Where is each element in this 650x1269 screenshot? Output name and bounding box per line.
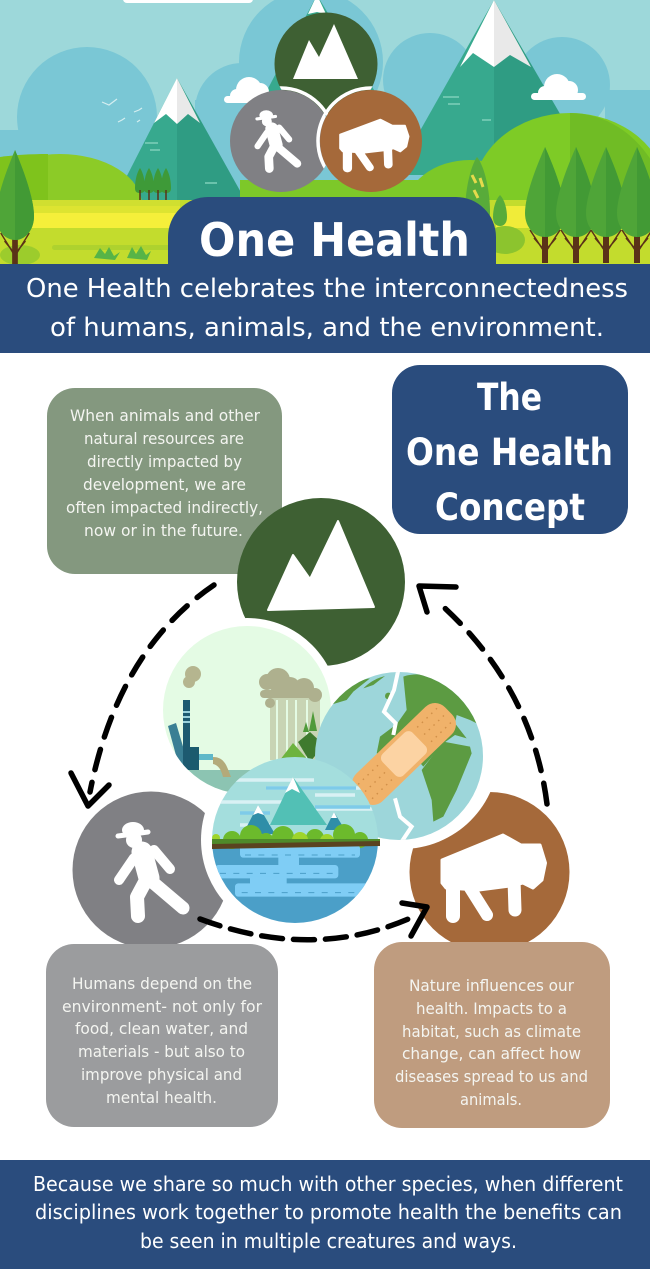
box text: now or in the future. xyxy=(84,521,243,540)
header illustration: mountain landscape xyxy=(0,0,650,277)
bushes xyxy=(465,157,525,254)
panel: concept heading xyxy=(392,365,628,534)
left mountain xyxy=(127,78,240,200)
box text: development, we are xyxy=(83,475,246,494)
closing text: be seen in multiple creatures and ways. xyxy=(140,1229,517,1253)
concept heading text: Concept xyxy=(435,486,585,529)
image: earth with bandage xyxy=(315,672,483,840)
panel: humans text box xyxy=(46,944,278,1127)
closing band xyxy=(0,1160,650,1269)
box text: animals. xyxy=(460,1090,522,1109)
box text: health. Impacts to a xyxy=(416,999,567,1018)
box text: materials - but also to xyxy=(78,1042,245,1061)
box text: When animals and other xyxy=(70,406,260,425)
right mountain xyxy=(409,0,560,175)
center mountain peak xyxy=(268,0,374,92)
box text: Humans depend on the xyxy=(72,974,252,993)
box text: environment- not only for xyxy=(62,997,262,1016)
concept heading text: One Health xyxy=(406,431,613,474)
background hills of sky xyxy=(0,0,650,190)
box text: change, can affect how xyxy=(402,1044,581,1063)
intro text: of humans, animals, and the environment. xyxy=(50,313,604,343)
icon: environment circle xyxy=(237,498,405,666)
bandage xyxy=(346,697,462,811)
ground strip xyxy=(212,839,380,846)
small trees xyxy=(135,168,171,200)
left hill xyxy=(0,154,142,200)
box text: Nature influences our xyxy=(409,976,574,995)
arrow: environment to humans xyxy=(71,585,214,806)
image: landscape with water xyxy=(212,757,380,923)
logo: person circle xyxy=(228,88,334,194)
closing text: Because we share so much with other species, when different xyxy=(33,1172,623,1196)
box text: often impacted indirectly, xyxy=(66,498,263,517)
arrow: animals to environment xyxy=(419,586,547,804)
icon: human circle xyxy=(72,792,230,948)
arrow: humans to animals xyxy=(200,903,427,940)
logo: bison circle xyxy=(318,88,424,194)
left tree xyxy=(0,150,34,266)
clouds xyxy=(224,74,586,103)
intro band xyxy=(0,264,650,353)
box text: food, clean water, and xyxy=(75,1019,248,1038)
box text: improve physical and xyxy=(81,1065,242,1084)
box text: directly impacted by xyxy=(87,452,242,471)
white halos behind center images xyxy=(155,618,499,934)
box text: diseases spread to us and xyxy=(395,1067,588,1086)
panel: animals and natural resources text box xyxy=(47,388,282,574)
logo: mountain circle xyxy=(274,12,378,116)
right hills xyxy=(240,113,650,200)
grass tufts xyxy=(94,246,151,260)
yellow field xyxy=(0,200,650,266)
panel: nature text box xyxy=(374,942,610,1128)
title: One Health xyxy=(199,213,470,267)
closing text: disciplines work together to promote health the benefits can xyxy=(35,1200,622,1224)
concept heading text: The xyxy=(477,376,542,419)
box text: mental health. xyxy=(106,1088,217,1107)
box text: habitat, such as climate xyxy=(402,1022,581,1041)
intro text: One Health celebrates the interconnectedness xyxy=(26,274,628,304)
birds xyxy=(102,99,142,122)
right trees xyxy=(525,147,650,263)
title tab xyxy=(168,197,496,267)
logo: three circles xyxy=(228,12,424,194)
icon: animal circle xyxy=(410,792,570,952)
box text: natural resources are xyxy=(84,429,244,448)
image: polluting factory xyxy=(163,626,331,792)
